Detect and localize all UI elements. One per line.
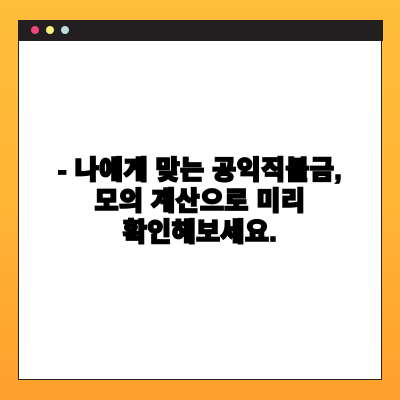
- title text: 모의 계산으로 미리: [95, 186, 305, 216]
- title text: [58, 155, 342, 247]
- title text: - 나에게 맞는 공익직불금,: [58, 155, 342, 185]
- window title bar: [18, 20, 382, 41]
- icon: yellow window dot: [46, 26, 54, 34]
- icon: pink window dot: [31, 26, 39, 34]
- title text: 확인해보세요.: [123, 217, 277, 247]
- icon: pale blue window dot: [61, 26, 69, 34]
